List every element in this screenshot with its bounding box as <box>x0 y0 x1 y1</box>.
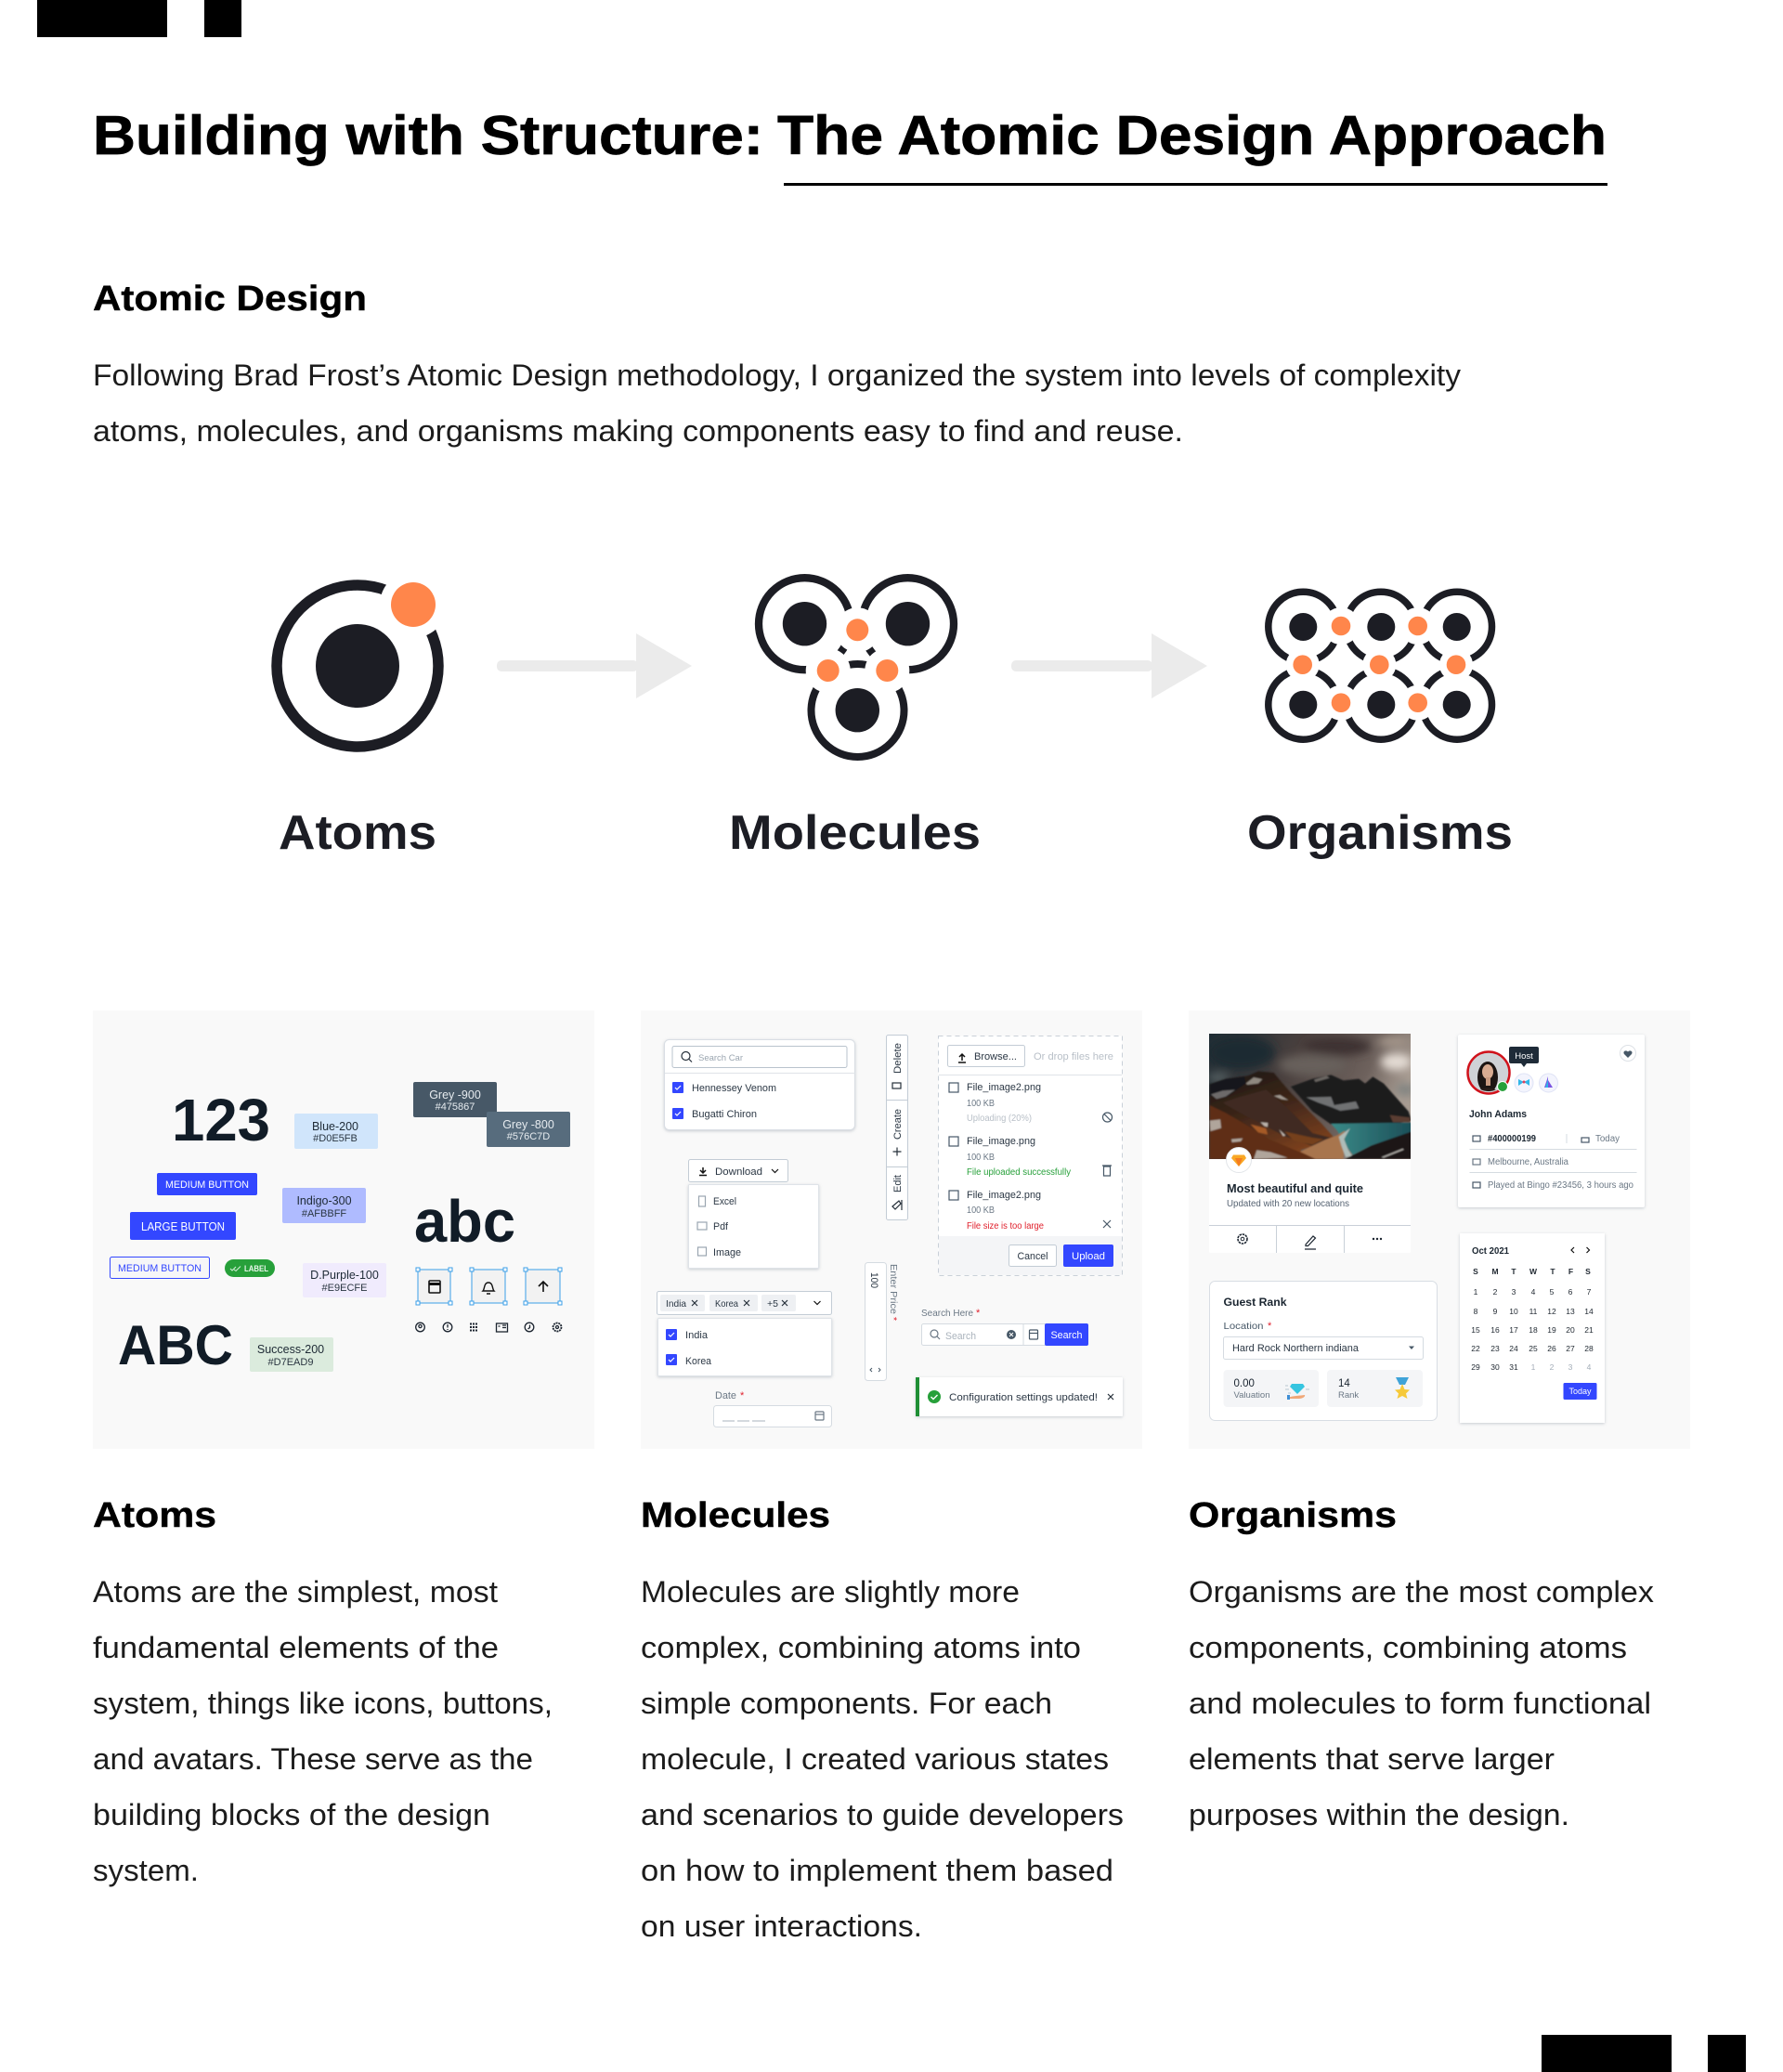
weekday headers: M <box>1491 1267 1499 1276</box>
file upload: Cancel <box>1018 1251 1048 1262</box>
swatch: grey-900: #475867 <box>436 1101 475 1113</box>
date grid: 16 <box>1490 1325 1500 1335</box>
body: organisms: components, combining atoms <box>1189 1631 1627 1664</box>
search field with button: Search <box>945 1331 976 1342</box>
vertical number input: * <box>888 1317 899 1321</box>
date grid: 4 <box>1587 1362 1592 1372</box>
file upload: File_image2.png <box>967 1190 1041 1201</box>
date grid: 7 <box>1587 1287 1592 1297</box>
download dropdown: Pdf <box>713 1221 729 1232</box>
date grid: 24 <box>1509 1344 1518 1353</box>
body: molecules: on user interactions. <box>641 1909 922 1943</box>
search with checkbox list: Hennessey Venom <box>692 1083 776 1094</box>
file upload: 100 KB <box>967 1205 995 1216</box>
search field with button: * <box>976 1308 981 1319</box>
body: molecules: complex, combining atoms into <box>641 1631 1081 1664</box>
photo: mountain lake <box>1207 1031 1414 1161</box>
profile card: #400000199 <box>1488 1134 1536 1144</box>
search field with button <box>921 1308 1088 1346</box>
date grid: 17 <box>1509 1325 1518 1335</box>
body: atoms <box>93 1575 553 1887</box>
tooltip: host: Host <box>1515 1051 1533 1062</box>
download dropdown: Excel <box>713 1196 736 1207</box>
date grid: 25 <box>1529 1344 1538 1353</box>
body: organisms: elements that serve larger <box>1189 1742 1555 1776</box>
vertical tab actions: Edit <box>892 1175 904 1192</box>
date grid: 10 <box>1509 1307 1518 1316</box>
date grid: 21 <box>1584 1325 1594 1335</box>
date grid: 13 <box>1566 1307 1575 1316</box>
guest rank card: 0.00 <box>1233 1378 1255 1389</box>
swatch: success-200 <box>250 1337 333 1372</box>
label: Atoms: Atoms <box>279 806 436 860</box>
body: atoms: and avatars. These serve as the <box>93 1742 533 1776</box>
body: molecules: molecule, I created various states <box>641 1742 1109 1776</box>
multi-select with chips: India <box>666 1298 686 1310</box>
vertical tab actions <box>886 1035 908 1220</box>
file upload: File_image2.png <box>967 1082 1041 1093</box>
badge: gem figure <box>1540 1074 1558 1092</box>
file upload: Uploading (20%) <box>967 1114 1032 1124</box>
date grid: 11 <box>1529 1307 1538 1316</box>
date grid: 8 <box>1474 1307 1478 1316</box>
vertical tab actions: Create <box>892 1109 904 1140</box>
search field with button: Search Here <box>921 1308 973 1319</box>
body: organisms <box>1189 1575 1654 1831</box>
icon: star medal <box>1395 1377 1410 1399</box>
column: molecules text <box>641 1496 1124 1943</box>
title: Building with Structure: <box>93 105 763 166</box>
small icon row <box>416 1323 561 1332</box>
date grid: 2 <box>1493 1287 1498 1297</box>
swatch: d.purple-100 <box>303 1263 386 1297</box>
date grid: 4 <box>1531 1287 1536 1297</box>
date grid: 1 <box>1531 1362 1536 1372</box>
icon: atom <box>277 571 447 747</box>
guest rank card: Rank <box>1338 1390 1359 1401</box>
body: atoms: system. <box>93 1854 199 1887</box>
date grid: 9 <box>1493 1307 1498 1316</box>
button: medium: MEDIUM BUTTON <box>165 1179 249 1191</box>
badge: sketch diamond <box>1226 1148 1252 1172</box>
calendar card: Oct 2021 <box>1472 1246 1509 1257</box>
guest rank card: Hard Rock Northern indiana <box>1232 1343 1360 1354</box>
file upload: Upload <box>1072 1251 1105 1262</box>
date grid: 3 <box>1568 1362 1573 1372</box>
vertical number input: Enter Price <box>888 1264 899 1314</box>
body: molecules <box>641 1575 1124 1943</box>
button: outline medium: MEDIUM BUTTON <box>118 1263 202 1274</box>
icon: settings <box>1238 1234 1247 1244</box>
icon: edit <box>1305 1236 1316 1249</box>
body: atoms: Atoms are the simplest, most <box>93 1575 498 1609</box>
date input: Date <box>715 1390 736 1401</box>
intro paragraph: Following Brad Frost’s Atomic Design methodology, I organized the system into levels of complexity <box>93 358 1461 392</box>
intro paragraph: atoms, molecules, and organisms making components easy to find and reuse. <box>93 414 1183 448</box>
diagram: atom to molecule to organism <box>277 571 1513 860</box>
date grid: 18 <box>1529 1325 1538 1335</box>
body: atoms: building blocks of the design <box>93 1798 490 1831</box>
date grid: 26 <box>1547 1344 1556 1353</box>
avatar <box>1467 1051 1510 1094</box>
date grid: 22 <box>1471 1344 1480 1353</box>
file upload: File_image.png <box>967 1136 1035 1147</box>
image card: Updated with 20 new locations <box>1227 1199 1349 1209</box>
profile card: John Adams <box>1469 1109 1527 1120</box>
today button <box>1564 1383 1597 1400</box>
swatch: blue-200: Blue-200 <box>312 1120 358 1133</box>
weekday headers: S <box>1473 1267 1478 1276</box>
body: organisms: purposes within the design. <box>1189 1798 1569 1831</box>
guest rank card: 14 <box>1338 1378 1350 1389</box>
body: atoms: fundamental elements of the <box>93 1631 499 1664</box>
file upload: 100 KB <box>967 1153 995 1163</box>
label: Organisms: Organisms <box>1247 806 1513 860</box>
weekday headers: T <box>1511 1267 1516 1276</box>
today button: Today <box>1568 1387 1592 1396</box>
guest rank card: * <box>1268 1321 1272 1332</box>
date grid: 3 <box>1512 1287 1516 1297</box>
button: large <box>130 1212 236 1240</box>
body: atoms: system, things like icons, buttons, <box>93 1687 553 1720</box>
weekday headers: W <box>1529 1267 1538 1276</box>
icon: molecule <box>759 578 954 757</box>
date grid: 14 <box>1584 1307 1594 1316</box>
weekday headers: F <box>1568 1267 1573 1276</box>
file upload: Browse... <box>974 1051 1017 1062</box>
download dropdown: Download <box>715 1166 762 1178</box>
swatch: d.purple-100: D.Purple-100 <box>310 1269 379 1282</box>
date grid: 5 <box>1550 1287 1555 1297</box>
swatch: blue-200: #D0E5FB <box>313 1133 358 1144</box>
panel: organisms <box>1209 1033 1647 1427</box>
weekday headers <box>1473 1267 1591 1276</box>
title <box>93 105 1607 186</box>
multi-select with chips: +5 <box>767 1298 778 1310</box>
swatch: grey-900: Grey -900 <box>429 1088 481 1101</box>
file upload: Or drop files here <box>1034 1051 1113 1062</box>
button: medium <box>157 1173 257 1195</box>
multi-select with chips: Korea <box>715 1298 738 1310</box>
capitals sample: ABC <box>118 1314 233 1376</box>
search with checkbox list: Bugatti Chiron <box>692 1109 757 1120</box>
body: organisms: Organisms are the most complex <box>1189 1575 1654 1609</box>
tooltip: host <box>1509 1047 1539 1067</box>
search with checkbox list <box>665 1040 855 1129</box>
date grid: 2 <box>1550 1362 1555 1372</box>
profile card: Melbourne, Australia <box>1488 1157 1568 1167</box>
multi-select with chips: Korea <box>685 1356 712 1367</box>
date grid: 1 <box>1474 1287 1478 1297</box>
body: molecules: on how to implement them based <box>641 1854 1113 1887</box>
multi-select with chips: India <box>685 1330 709 1341</box>
search field with button: Search <box>1051 1330 1083 1341</box>
intro paragraph <box>93 358 1461 448</box>
decorative corner blocks: bottom <box>1542 2035 1746 2072</box>
badge: bow <box>1515 1074 1533 1092</box>
download dropdown <box>689 1159 819 1269</box>
guest rank card: Valuation <box>1233 1390 1270 1401</box>
date input <box>713 1390 832 1427</box>
profile card <box>1458 1035 1645 1207</box>
date grid: 15 <box>1471 1325 1480 1335</box>
label pill: LABEL <box>244 1264 268 1273</box>
vertical number input: 100 <box>868 1272 879 1288</box>
date grid <box>1471 1287 1594 1372</box>
date input: * <box>740 1390 745 1401</box>
numerals sample: 123 <box>172 1087 270 1153</box>
toast: configuration updated: Configuration settings updated! <box>949 1392 1098 1403</box>
guest rank card: Location <box>1224 1321 1264 1332</box>
vertical number input <box>865 1263 899 1380</box>
swatch: indigo-300: #AFBBFF <box>302 1208 346 1219</box>
file upload: 100 KB <box>967 1099 995 1109</box>
date grid: 6 <box>1568 1287 1573 1297</box>
column: atoms text <box>93 1496 553 1887</box>
weekday headers: S <box>1585 1267 1591 1276</box>
date grid: 12 <box>1547 1307 1556 1316</box>
heading: Organisms: Organisms <box>1189 1496 1397 1535</box>
swatch: blue-200 <box>294 1114 378 1149</box>
date grid: 19 <box>1547 1325 1556 1335</box>
date grid: 28 <box>1584 1344 1594 1353</box>
file upload <box>938 1036 1122 1276</box>
swatch: grey-800: #576C7D <box>507 1131 550 1142</box>
swatch: indigo-300 <box>282 1188 366 1223</box>
vertical tab actions: Delete <box>892 1043 904 1074</box>
toast: configuration updated <box>916 1377 1123 1416</box>
button: outline medium <box>110 1258 210 1278</box>
icon components with selection handles <box>416 1268 562 1305</box>
favourite heart <box>1620 1046 1636 1061</box>
decorative corner blocks: top <box>37 0 241 37</box>
date grid: 30 <box>1490 1362 1500 1372</box>
icon: bell <box>483 1283 494 1294</box>
swatch: success-200: Success-200 <box>257 1343 324 1356</box>
column: organisms text <box>1189 1496 1654 1831</box>
calendar card <box>1460 1233 1605 1423</box>
heading: Molecules: Molecules <box>641 1496 830 1535</box>
guest rank card: Guest Rank <box>1224 1296 1287 1309</box>
icon: more <box>1373 1238 1382 1240</box>
body: molecules: simple components. For each <box>641 1687 1052 1720</box>
multi-select with chips <box>657 1291 832 1376</box>
weekday headers: T <box>1550 1267 1555 1276</box>
body: organisms: and molecules to form functional <box>1189 1687 1651 1720</box>
label pill <box>225 1259 275 1277</box>
file upload: File size is too large <box>967 1221 1044 1231</box>
swatch: indigo-300: Indigo-300 <box>296 1194 352 1207</box>
date grid: 29 <box>1471 1362 1480 1372</box>
swatch: d.purple-100: #E9ECFE <box>322 1283 367 1294</box>
date grid: 31 <box>1509 1362 1518 1372</box>
icon: organism <box>1269 592 1491 739</box>
swatch: grey-800 <box>487 1112 570 1147</box>
lowercase sample: abc <box>414 1188 515 1255</box>
arrow: molecules to organisms <box>1011 633 1207 698</box>
swatch: success-200: #D7EAD9 <box>268 1357 313 1368</box>
heading: Atomic Design: Atomic Design <box>93 280 367 319</box>
icon: arrow up <box>539 1282 548 1292</box>
date grid: 23 <box>1490 1344 1500 1353</box>
download dropdown: Image <box>713 1247 741 1258</box>
file upload: File uploaded successfully <box>967 1167 1071 1178</box>
title: The Atomic Design Approach <box>777 105 1607 166</box>
panel: molecules <box>641 1010 1142 1449</box>
profile card: Today <box>1595 1134 1620 1144</box>
arrow: atoms to molecules <box>497 633 692 698</box>
date grid: 27 <box>1566 1344 1575 1353</box>
image card <box>1207 1031 1414 1253</box>
button: large: LARGE BUTTON <box>141 1219 225 1233</box>
body: molecules: Molecules are slightly more <box>641 1575 1020 1609</box>
body: molecules: and scenarios to guide developers <box>641 1798 1124 1831</box>
heading: Atoms: Atoms <box>93 1496 216 1535</box>
icon: calendar <box>429 1281 440 1293</box>
date grid: 20 <box>1566 1325 1575 1335</box>
search with checkbox list: Search Car <box>698 1053 743 1063</box>
swatch: grey-800: Grey -800 <box>502 1118 554 1131</box>
profile card: Played at Bingo #23456, 3 hours ago <box>1488 1180 1633 1191</box>
image card: Most beautiful and quite <box>1227 1181 1363 1195</box>
swatch: grey-900 <box>413 1082 497 1117</box>
label: Molecules: Molecules <box>729 806 981 860</box>
panel: atoms <box>93 1010 594 1449</box>
guest rank card <box>1209 1282 1438 1421</box>
icon: diamond on hand <box>1285 1384 1309 1400</box>
